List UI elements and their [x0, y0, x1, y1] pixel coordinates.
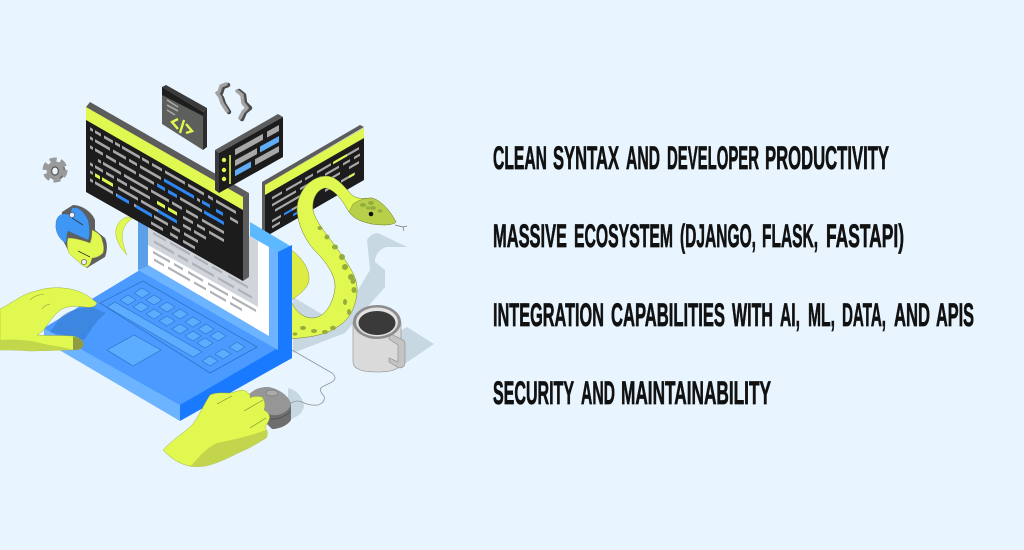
- text: integration capabilities: AND: [894, 297, 930, 333]
- icon: coffee mug: [353, 305, 405, 372]
- text: clean syntax: CLEAN: [493, 140, 547, 176]
- panel: small tag window: [162, 85, 207, 150]
- text: clean syntax: [493, 140, 889, 176]
- text: integration capabilities: WITH: [732, 297, 773, 333]
- icon: curly braces: [217, 84, 250, 119]
- laptop base: [44, 270, 292, 420]
- icon: code tag: [172, 119, 192, 133]
- keyboard: [100, 281, 257, 373]
- panel: large code window: [86, 102, 249, 281]
- text: integration capabilities: CAPABILITIES: [611, 297, 725, 333]
- text: integration capabilities: INTEGRATION: [493, 297, 604, 333]
- illustration: python developer at laptop: [0, 84, 434, 467]
- text: massive ecosystem: ECOSYSTEM: [574, 218, 673, 254]
- text: security: [493, 375, 771, 411]
- panel: right code window: [262, 125, 364, 237]
- laptop: [44, 172, 292, 421]
- text: security: SECURITY: [493, 375, 574, 411]
- text: security: AND: [581, 375, 615, 411]
- laptop screen: [138, 172, 292, 350]
- text: clean syntax: DEVELOPER: [667, 140, 759, 176]
- text: clean syntax: AND: [626, 140, 660, 176]
- text: massive ecosystem: [493, 218, 904, 254]
- text: clean syntax: SYNTAX: [553, 140, 619, 176]
- icon: left hand: [0, 288, 106, 351]
- text: massive ecosystem: FASTAPI): [826, 218, 904, 254]
- text: massive ecosystem: MASSIVE: [493, 218, 567, 254]
- icon: right hand: [163, 390, 270, 467]
- text: integration capabilities: DATA,: [842, 297, 886, 333]
- text: integration capabilities: APIS: [936, 297, 974, 333]
- text: massive ecosystem: (DJANGO,: [680, 218, 756, 254]
- icon: gear: [46, 161, 66, 180]
- icon: mouse cord: [288, 350, 335, 405]
- icon: snake: [285, 176, 407, 339]
- trackpad: [107, 335, 161, 366]
- panel: middle code window: [215, 114, 283, 193]
- icon: mouse: [248, 387, 291, 429]
- text: integration capabilities: [493, 297, 974, 333]
- text: security: MAINTAINABILITY: [621, 375, 771, 411]
- icon: snake tail: [116, 217, 133, 255]
- text: integration capabilities: AI,: [780, 297, 800, 333]
- cast shadows: [288, 233, 434, 420]
- text: clean syntax: PRODUCTIVITY: [765, 140, 889, 176]
- text: massive ecosystem: FLASK,: [762, 218, 818, 254]
- text: integration capabilities: ML,: [808, 297, 835, 333]
- icon: python logo: [56, 205, 107, 268]
